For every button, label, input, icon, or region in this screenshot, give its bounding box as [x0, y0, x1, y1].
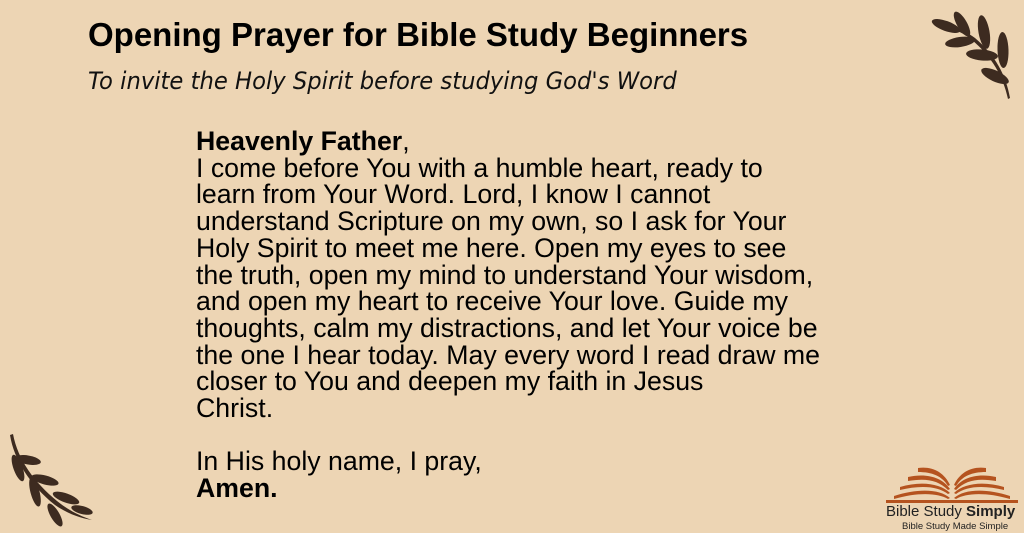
icon: leaf branch bottom left — [10, 434, 93, 526]
logo — [886, 468, 1018, 532]
prayer text: the truth, open my mind to understand Your wisdom, — [196, 260, 813, 290]
logo text: Bible Study Simply — [886, 503, 1015, 520]
prayer text: Amen. — [196, 473, 278, 503]
prayer text — [196, 126, 820, 503]
prayer text: learn from Your Word. Lord, I know I cannot — [196, 179, 710, 209]
prayer text: closer to You and deepen my faith in Jesus — [196, 366, 703, 396]
prayer text: the one I hear today. May every word I read draw me — [196, 340, 820, 370]
prayer text: Christ. — [196, 393, 273, 423]
prayer text: Holy Spirit to meet me here. Open my eyes to see — [196, 233, 786, 263]
title: Opening Prayer for Bible Study Beginners — [88, 16, 748, 53]
prayer text: thoughts, calm my distractions, and let Your voice be — [196, 313, 818, 343]
prayer text: In His holy name, I pray, — [196, 446, 482, 476]
icon: open book — [886, 468, 1018, 503]
prayer text: I come before You with a humble heart, ready to — [196, 153, 763, 183]
prayer text: understand Scripture on my own, so I ask for Your — [196, 206, 786, 236]
icon: leaf branch top right — [932, 12, 1010, 99]
subtitle: To invite the Holy Spirit before studying God's Word — [88, 67, 677, 95]
prayer text: Heavenly Father, — [196, 126, 410, 156]
prayer text: and open my heart to receive Your love. Guide my — [196, 286, 788, 316]
logo tagline: Bible Study Made Simple — [902, 521, 1008, 532]
